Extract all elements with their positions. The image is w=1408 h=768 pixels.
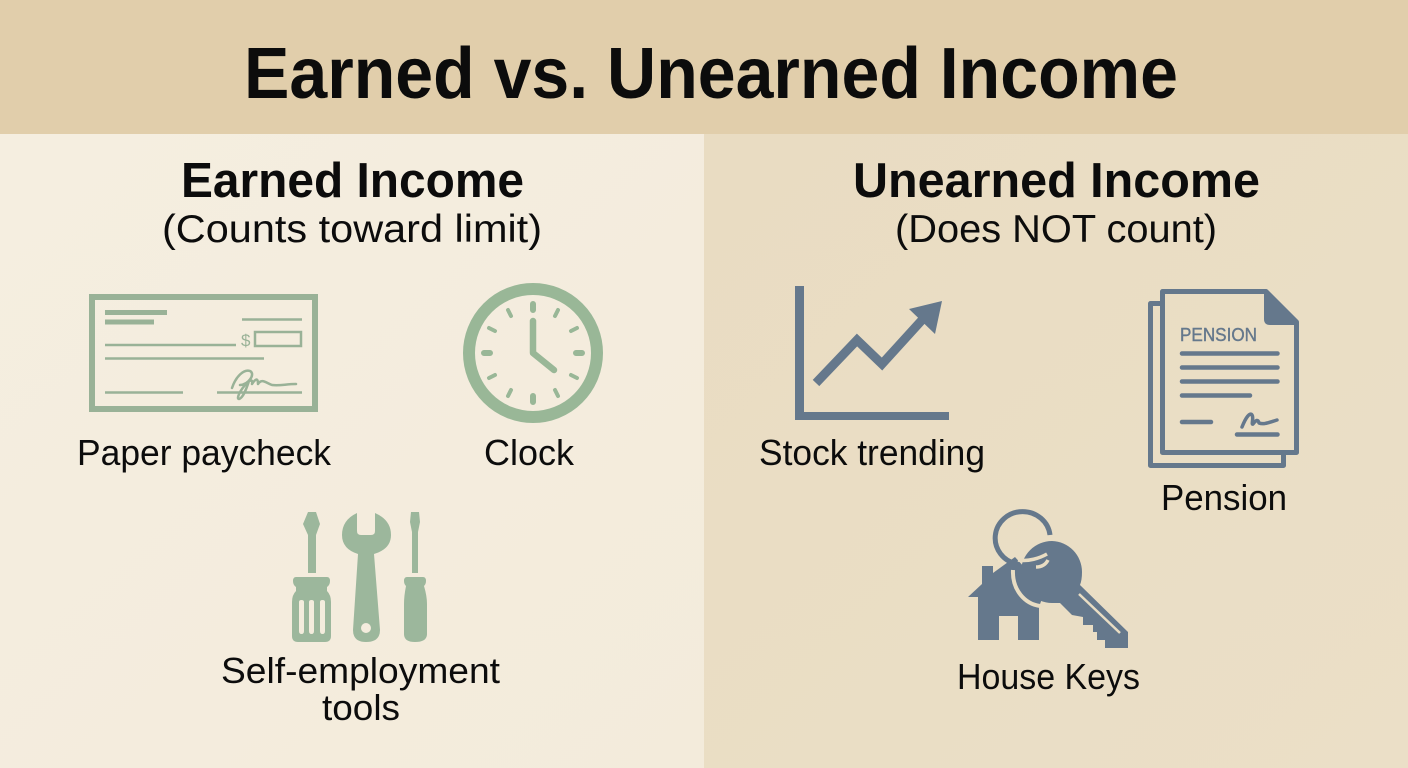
icon: clock [469,289,597,417]
label: stock trending: Stock trending [759,432,985,473]
subheading: does not count: (Does NOT count) [895,208,1217,251]
key ring [995,512,1050,564]
icon: self-employment tools [292,512,427,642]
panel: earned income [0,134,704,768]
title: Earned vs. Unearned Income [244,34,1178,114]
label: paper paycheck: Paper paycheck [77,432,332,473]
signature [232,371,296,399]
left screwdriver [292,512,331,642]
dollar sign: $ [241,331,251,350]
heading: unearned income: Unearned Income [853,154,1260,208]
right screwdriver [404,512,427,642]
key slit and ring cut-outs [1079,594,1120,633]
label: self-employment tools [221,650,500,728]
label: clock: Clock [484,432,575,473]
heading: earned income: Earned Income [181,154,524,208]
icon: paper paycheck [92,297,315,409]
subheading: counts toward limit: (Counts toward limit) [162,208,542,251]
icon: house keys [968,512,1128,648]
key [1021,541,1128,648]
wrench [342,513,391,642]
document heading text: PENSION [1180,325,1257,345]
label: house keys: House Keys [957,656,1140,697]
label: self-employment tools: Self-employment [221,650,500,691]
title banner [0,0,1408,134]
panel: unearned income [704,134,1408,768]
signature [1242,414,1277,427]
label: self-employment tools: tools [322,687,400,728]
icon: pension document [1150,290,1298,466]
house [968,557,1045,640]
icon: stock trending chart [795,286,949,420]
label: pension: Pension [1161,477,1287,518]
